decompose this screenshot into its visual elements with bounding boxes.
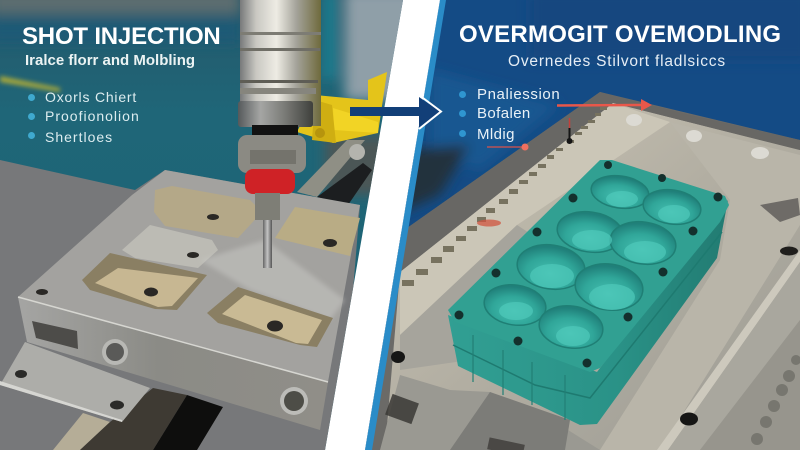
pocket: front right [207, 287, 333, 347]
side slot [32, 321, 78, 349]
teal mold [448, 160, 729, 425]
subheading: overmolding: Overnedes Stilvort fladlsiccs [508, 53, 726, 70]
side bolts [102, 339, 128, 365]
background: granite table [0, 160, 360, 450]
pocket: front left [82, 253, 207, 310]
subheading: shot injection: Iralce florr and Molbling [25, 52, 195, 69]
holes [36, 214, 337, 332]
pocket: middle frosted [122, 225, 218, 268]
list: shot injection points: Oxorls Chiert [45, 89, 137, 105]
pocket: back left [154, 186, 262, 238]
cavities [482, 172, 703, 352]
machine rails [297, 140, 372, 205]
list: shot injection points: Shertloes [45, 129, 113, 145]
heading: shot injection: SHOT INJECTION [22, 23, 221, 50]
row of perforations [402, 107, 607, 286]
list: overmolding points: Bofalen [477, 105, 531, 122]
metal table [365, 92, 800, 450]
yellow bracket arm [297, 72, 387, 143]
table bolts and holes [391, 114, 800, 445]
spindle [238, 0, 321, 268]
list: overmolding points [459, 86, 560, 143]
bracket [0, 342, 150, 422]
list: shot injection points: Proofionolion [45, 108, 140, 124]
red ring [245, 169, 295, 194]
pocket: back right [275, 207, 360, 256]
mold plate [18, 170, 360, 430]
panel: shot injection photo [0, 0, 415, 450]
panel: overmolding photo [318, 0, 800, 450]
list: overmolding points: Mldig [477, 126, 515, 143]
divider: white diagonal band [365, 0, 446, 450]
list: shot injection points [28, 89, 140, 145]
mold holes [454, 161, 722, 368]
heading: overmolding: OVERMOGIT OVEMODLING [459, 21, 781, 48]
list: overmolding points: Pnaliession [477, 86, 560, 103]
